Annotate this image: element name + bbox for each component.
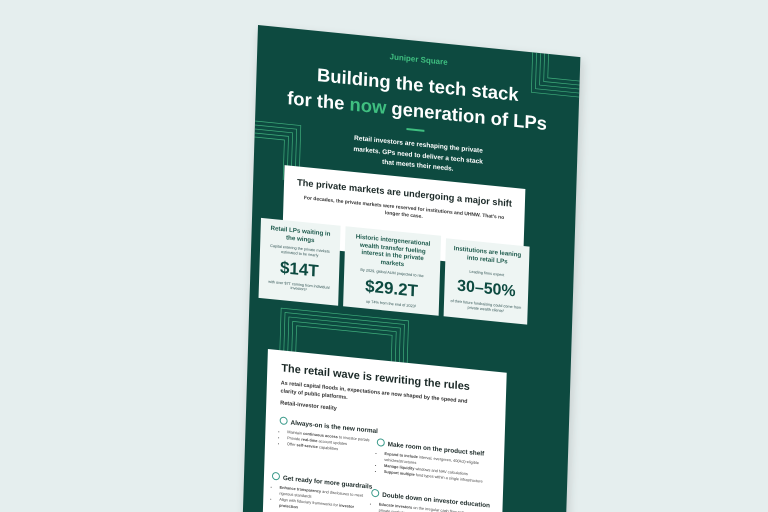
title: for the now generation of LPs: [287, 87, 547, 134]
title: [287, 64, 547, 134]
intro: As retail capital floods in, expectations are now shaped by the speed and clarity of public platforms.: [280, 380, 468, 405]
decoration: lower lines: [280, 308, 409, 363]
card: $29.2T: up 74% from the end of 2023²: [366, 299, 416, 308]
card: 30-50%: Institutions are leaning into retail LPs: [454, 245, 521, 265]
item: product shelf: [374, 438, 484, 484]
card: $29.2T: [343, 226, 441, 316]
card: $29.2T: By 2029, global AUM projected to rise: [360, 268, 424, 278]
card: $14T: with over $7T coming from individual investors¹: [268, 279, 330, 292]
item: product shelf: Make room on the product shelf: [388, 441, 484, 458]
item: product shelf: Expand to include interval, evergreen, 40(Act)-eligible vehicles/structures: [384, 451, 479, 465]
brand: Juniper Square: [389, 52, 448, 67]
panel: retail wave: [262, 349, 507, 512]
item: always-on: Maintain continuous access to investor portals: [287, 429, 370, 442]
item: product shelf: Support multiple fund types within a single infrastructure: [384, 469, 483, 484]
item: always-on: Always-on is the new normal: [290, 419, 378, 435]
document: [242, 25, 580, 512]
item: always-on: [278, 416, 378, 451]
item: guardrails: Align with fiduciary frameworks for investor protection: [279, 497, 354, 509]
card: 30-50%: Leading firms expect: [469, 270, 504, 277]
card: 30-50%: of their future fundraising could come from private wealth clients³: [450, 299, 521, 313]
item: education: [370, 489, 490, 512]
intro text: For decades, the private markets were reserved for institutions and UHNW. That's no longer the case.: [304, 195, 504, 221]
card: 30-50%: [444, 238, 530, 325]
card: $29.2T: $29.2T: [365, 276, 418, 300]
item: education: Double down on investor education: [382, 492, 490, 509]
item: guardrails: [270, 472, 372, 509]
subheading: Retail-investor reality: [280, 400, 337, 412]
decoration: left lines: [254, 120, 302, 180]
card: $29.2T: Historic intergenerational wealth transfer fueling interest in the private markets: [356, 233, 430, 268]
panel: private markets shift: [282, 165, 525, 269]
heading: The retail wave is rewriting the rules: [281, 362, 470, 393]
accent dash: [406, 128, 424, 132]
card: 30-50%: 30–50%: [457, 277, 516, 300]
item: guardrails: Enhance transparency and disclosures to meet rigorous standards: [279, 485, 363, 499]
card: $14T: $14T: [280, 258, 319, 280]
title: Building the tech stack: [317, 64, 519, 105]
heading: The private markets are undergoing a major shift: [297, 177, 512, 209]
item: always-on: Offer self-service capabilities: [287, 441, 338, 451]
subtitle: Retail investors are reshaping the private markets. GPs need to deliver a tech stack that meets their needs.: [353, 135, 483, 173]
item: guardrails: Get ready for more guardrails: [283, 475, 372, 491]
item: always-on: Provide real-time account updates: [287, 435, 347, 446]
decoration: top-right lines: [531, 52, 580, 98]
card: $14T: Capital entering the private markets estimated to be nearly: [270, 244, 330, 257]
card: $14T: [259, 218, 341, 306]
item: product shelf: Manage liquidity windows and NAV calculations: [384, 463, 468, 476]
card: $14T: Retail LPs waiting in the wings: [270, 225, 331, 244]
